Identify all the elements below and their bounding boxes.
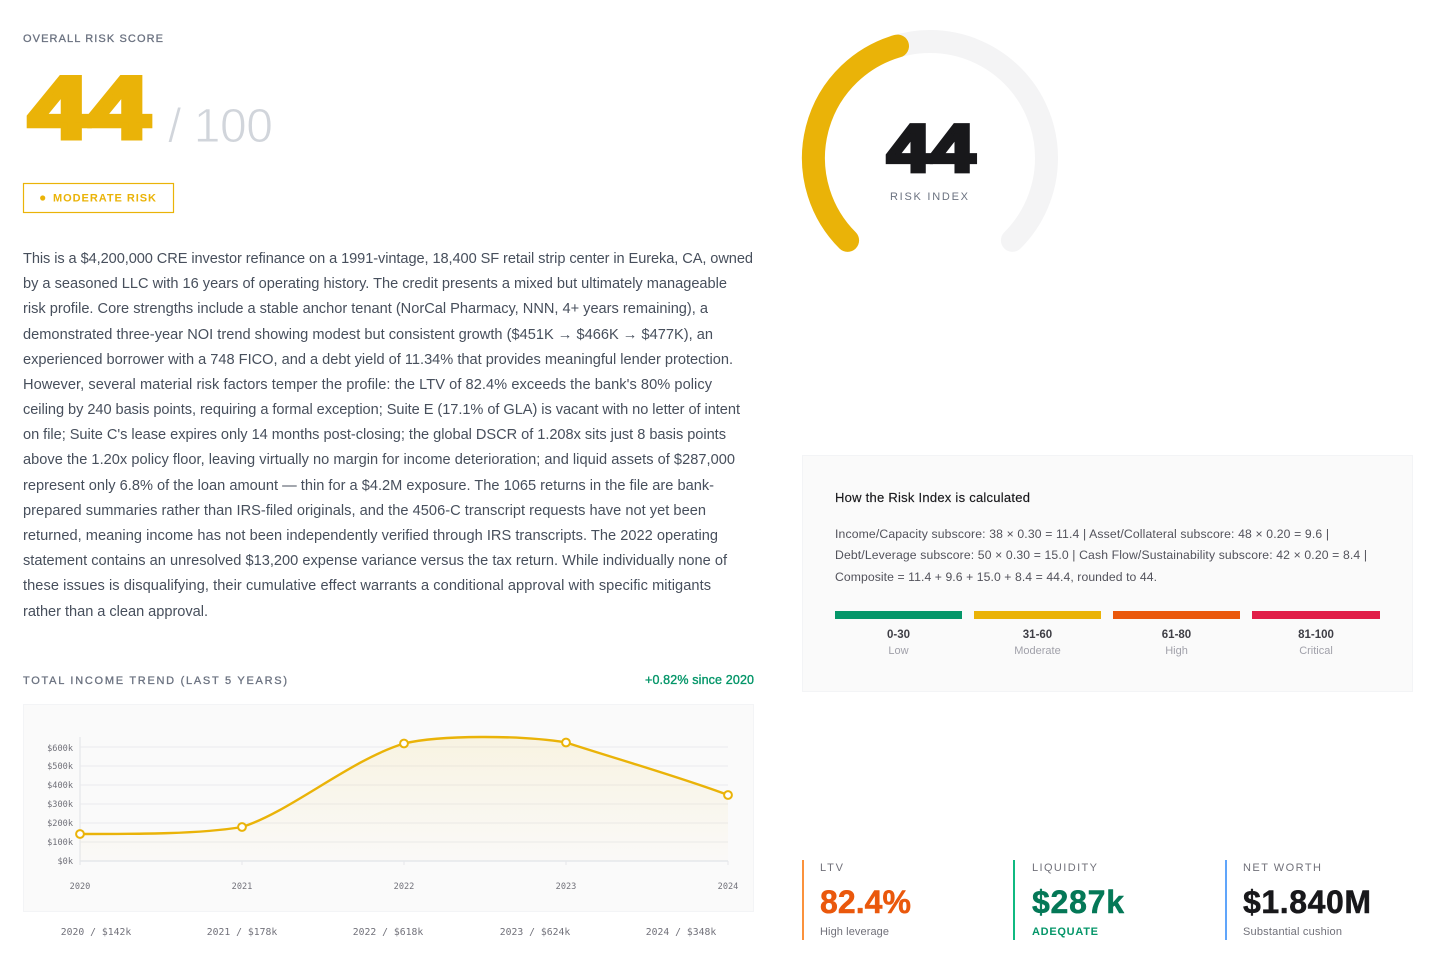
y axis labels: $400k [47, 781, 74, 791]
gauge caption: RISK INDEX [890, 191, 969, 203]
text block: risk narrative: these issues is disqualifying, their cumulative effect warrants a conditional approval with specific mitigants [23, 578, 711, 594]
text block: risk narrative [23, 251, 753, 620]
trend change callout: +0.82% since 2020 [645, 673, 754, 687]
gauge value number: 44 [887, 112, 975, 186]
badge: moderate risk [24, 184, 174, 212]
metric: net worth: Substantial cushion [1243, 926, 1342, 938]
x axis labels: 2021 [232, 882, 252, 892]
metric: LTV: 82.4% [820, 884, 911, 920]
panel: total income trend [23, 673, 754, 938]
panel: how the risk index is calculated [802, 456, 1412, 692]
heading: calculation: How the Risk Index is calculated [835, 490, 1030, 505]
metric: net worth [1225, 860, 1371, 940]
x axis labels [70, 882, 738, 892]
text block: risk narrative: by a seasoned LLC with 16 years of operating history. The credit presents a mixed but ultimately manageable [23, 276, 727, 292]
chart income line [80, 737, 728, 834]
y axis labels: $500k [47, 762, 74, 772]
y axis labels [47, 744, 74, 867]
gauge value arc [813, 46, 898, 240]
text block: risk narrative: returned, meaning income has not been independently verified through IRS transcripts. The 2022 operating [23, 528, 718, 544]
x axis labels: 2022 [394, 882, 414, 892]
chart: income line chart [24, 704, 754, 912]
metric: net worth: $1.840M [1243, 884, 1371, 920]
y axis labels: $200k [47, 819, 74, 829]
chart area fill [80, 737, 728, 861]
yearly income values: 2023 / $624k [500, 927, 570, 938]
score denominator: / 100 [168, 100, 273, 153]
yearly income values [61, 927, 716, 938]
metric: liquidity: ADEQUATE [1032, 926, 1098, 938]
y axis labels: $0k [57, 857, 74, 867]
gauge track [814, 42, 1046, 240]
heading: total income trend: TOTAL INCOME TREND (LAST 5 YEARS) [23, 675, 287, 687]
legend: high: 61-80 [1162, 629, 1191, 641]
text block: risk narrative: However, several material risk factors temper the profile: the LTV of 82.4% exceeds the bank's 80% policy [23, 377, 713, 393]
legend: high: High [1165, 645, 1188, 657]
x axis labels: 2023 [556, 882, 576, 892]
text block: risk narrative: experienced borrower with a 748 FICO, and a debt yield of 11.34% that provides meaningful lender protection. [23, 352, 733, 368]
metric: liquidity [1013, 860, 1124, 940]
panel: overall risk score [23, 33, 273, 212]
yearly income values: 2021 / $178k [207, 927, 277, 938]
metric: liquidity: LIQUIDITY [1032, 862, 1098, 874]
yearly income values: 2020 / $142k [61, 927, 131, 938]
metric: liquidity: $287k [1032, 884, 1124, 920]
yearly income values: 2022 / $618k [353, 927, 423, 938]
legend: low: Low [888, 645, 909, 657]
y axis labels: $600k [47, 744, 74, 754]
legend: low [835, 611, 962, 657]
metric: net worth: NET WORTH [1243, 862, 1321, 874]
text block: risk narrative: rather than a clean approval. [23, 604, 208, 620]
text block: calculation details [835, 527, 1367, 584]
text block: calculation details: Composite = 11.4 + 9.6 + 15.0 + 8.4 = 44.4, rounded to 44. [835, 570, 1157, 584]
heading: overall risk score: OVERALL RISK SCORE [23, 33, 163, 45]
text block: risk narrative: ceiling by 240 basis points, requiring a formal exception; Suite E (17.1% of GLA) is vacant with no letter of intent [23, 402, 740, 418]
y axis labels: $300k [47, 800, 74, 810]
x axis labels: 2024 [718, 882, 738, 892]
legend: low: 0-30 [887, 629, 910, 641]
x axis labels: 2020 [70, 882, 90, 892]
text block: risk narrative: demonstrated three-year NOI trend showing modest but consistent growth ($451K → $466K → $477K), an [23, 327, 713, 343]
text block: calculation details: Debt/Leverage subscore: 50 × 0.30 = 15.0 | Cash Flow/Sustainability subscore: 42 × 0.20 = 8.4 | [835, 548, 1367, 562]
metric: LTV: High leverage [820, 926, 889, 938]
text block: risk narrative: This is a $4,200,000 CRE investor refinance on a 1991-vintage, 18,400 SF retail strip center in Eureka, CA, owned [23, 251, 753, 267]
legend: critical: Critical [1299, 645, 1333, 657]
y axis labels: $100k [47, 838, 74, 848]
text block: risk narrative: prepared summaries rather than IRS-filed originals, and the 4506-C transcript requests have not yet been [23, 503, 706, 519]
text block: risk narrative: above the 1.20x policy floor, leaving virtually no margin for income deterioration; and liquid assets of $287,000 [23, 452, 735, 468]
legend: critical: 81-100 [1298, 629, 1334, 641]
chart: risk index gauge [813, 42, 1046, 240]
legend: moderate [974, 611, 1101, 657]
yearly income values: 2024 / $348k [646, 927, 716, 938]
text block: risk narrative: statement contains an unresolved $13,200 expense variance versus the tax return. While individually none of [23, 553, 728, 569]
text block: risk narrative: represent only 6.8% of the loan amount — thin for a $4.2M exposure. The 1065 returns in the file are bank- [23, 478, 714, 494]
metric: LTV: LTV [820, 862, 844, 874]
legend: moderate: 31-60 [1023, 629, 1052, 641]
legend: critical [1252, 611, 1380, 657]
big score 44: 44 [28, 60, 150, 156]
metric: LTV [802, 860, 911, 940]
text block: calculation details: Income/Capacity subscore: 38 × 0.30 = 11.4 | Asset/Collateral subscore: 48 × 0.20 = 9.6 | [835, 527, 1329, 541]
text block: risk narrative: risk profile. Core strengths include a stable anchor tenant (NorCal Pharmacy, NNN, 4+ years remaining), a [23, 301, 709, 317]
legend: high [1113, 611, 1240, 657]
legend: moderate: Moderate [1014, 645, 1061, 657]
text block: risk narrative: on file; Suite C's lease expires only 14 months post-closing; the global DSCR of 1.208x sits just 8 basis points [23, 427, 726, 443]
badge: moderate risk: MODERATE RISK [53, 192, 156, 204]
chart data points [76, 739, 732, 838]
